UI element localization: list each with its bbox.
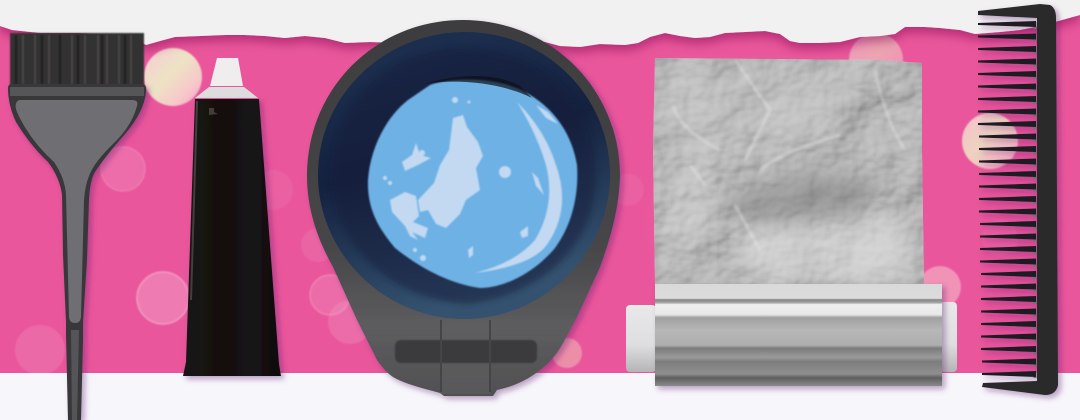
foil roll: [655, 284, 942, 386]
brush ridge: [10, 87, 144, 96]
blue colour mix: [368, 76, 577, 288]
bowl handle bar: [395, 320, 537, 394]
paint highlights: [383, 97, 562, 273]
brush face: [16, 100, 137, 323]
bokeh bubbles: [15, 33, 1018, 375]
foil roll cardboard core: [626, 302, 957, 372]
torn white paper top: [0, 0, 1080, 47]
foil creases: [673, 60, 905, 250]
aluminium foil: [626, 58, 957, 386]
foil sheet: [653, 58, 924, 285]
bowl outer shell: [307, 20, 620, 396]
bowl inner basin: [318, 32, 610, 319]
colour tube: [183, 58, 281, 376]
brush bristles: [10, 33, 144, 86]
tube cap: [210, 58, 243, 86]
foil tonal patches: [665, 70, 915, 282]
paint dark edge: [425, 76, 532, 98]
basin rim shading: [332, 48, 596, 304]
brush head and handle: [8, 84, 146, 420]
comb gum gaps: [1034, 22, 1036, 378]
tube shoulder: [195, 87, 258, 98]
mixing bowl: [307, 20, 620, 396]
tube body: [183, 99, 281, 376]
white paper bottom: [0, 373, 1080, 420]
black comb: [978, 4, 1058, 395]
tube gloss: [190, 101, 218, 300]
tint brush: [8, 33, 146, 420]
brush tail highlight: [71, 330, 79, 420]
comb teeth: [978, 21, 1036, 377]
comb spine: [978, 4, 1058, 395]
